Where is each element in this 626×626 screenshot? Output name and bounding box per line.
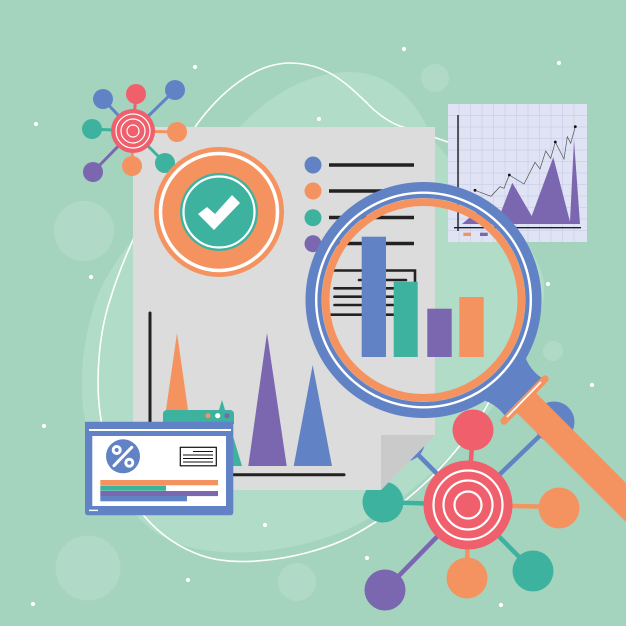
magnifier neck bbox=[476, 345, 542, 416]
network hub target bbox=[424, 460, 512, 550]
text card bbox=[180, 447, 216, 466]
large network diagram bbox=[362, 402, 580, 610]
icon: approval badge with check mark bbox=[154, 147, 284, 277]
back window tab bbox=[163, 410, 234, 424]
chart legend bbox=[463, 233, 488, 236]
network links bbox=[383, 422, 559, 590]
bar chart in lens bbox=[362, 237, 484, 357]
icon: magnifying glass bbox=[314, 190, 626, 522]
panel: report document bbox=[133, 127, 435, 490]
small network hub target bbox=[111, 109, 155, 153]
line series bbox=[474, 125, 577, 196]
white outline curve bbox=[98, 63, 490, 562]
chart axes bbox=[454, 115, 581, 231]
progress bars bbox=[100, 480, 218, 501]
small network nodes bbox=[82, 80, 187, 182]
panel: line and area chart on graph paper bbox=[448, 104, 587, 242]
area series bbox=[462, 140, 580, 224]
magnifier ring bbox=[314, 190, 534, 410]
background soft circles bbox=[54, 64, 563, 601]
icon: percent badge bbox=[106, 439, 140, 473]
panel: browser window with discount bbox=[85, 422, 233, 515]
small network links bbox=[92, 90, 177, 172]
triangle chart bbox=[150, 313, 344, 475]
list with coloured bullets bbox=[304, 156, 414, 252]
page fold bbox=[381, 435, 435, 490]
network nodes bbox=[362, 402, 580, 610]
text lines block bbox=[329, 270, 415, 315]
small network diagram bbox=[82, 80, 187, 182]
light blob bbox=[82, 72, 544, 552]
magnifier cuff bbox=[504, 379, 545, 421]
magnifier handle bbox=[514, 390, 626, 522]
